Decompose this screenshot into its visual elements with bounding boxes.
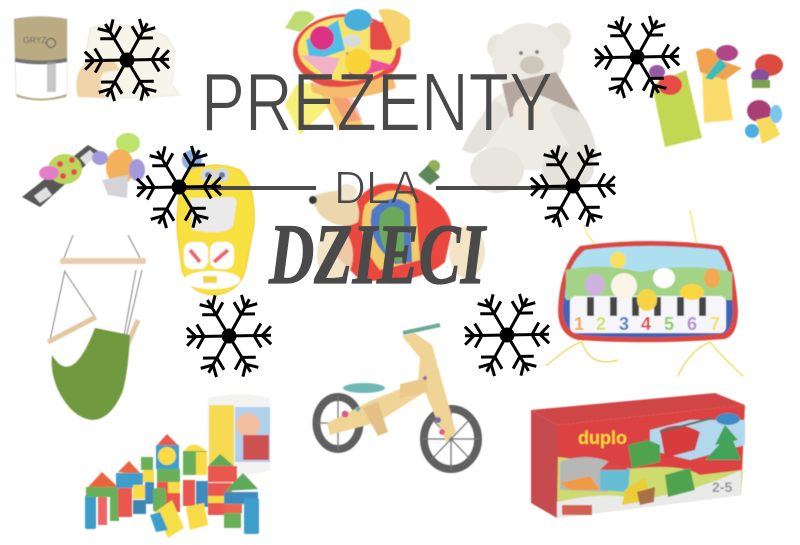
icon: LEGO Duplo box: duplo [578,428,627,448]
icon: wrist rattles on checkered strip [22,133,145,207]
snowflake 5 [186,293,272,379]
divider line left [179,186,316,190]
icon: green hanging chair [48,235,146,420]
icon: plush activity wheel [285,9,410,135]
icon: piano play mat: 4 [641,314,651,334]
icon: LEGO Duplo box [531,393,745,518]
snowflake 1 [84,17,170,103]
snowflake 4 [594,14,680,100]
heading: DZIECI: DZIECI [268,206,487,302]
icon: piano play mat: 6 [687,314,697,334]
heading: DLA: DLA [334,162,420,214]
icon: wooden pull-along dog [309,160,485,283]
heading: PREZENTY: PREZENTY [201,56,553,148]
icon: Gryzzle tin: GRYZ [23,35,46,45]
icon: baby phone toy [177,150,254,295]
icon: piano play mat: 5 [664,314,674,334]
icon: Gryzzle tin [14,16,67,100]
icon: piano play mat: 7 [710,314,720,334]
divider line right [436,186,573,190]
icon: LEGO Duplo box: 2-5 [712,479,732,495]
icon: teddy bear [462,23,597,193]
snowflake 3 [530,143,616,229]
icon: baby rattle socks [649,45,783,147]
icon: piano play mat: 2 [596,314,606,334]
snowflake 2 [136,144,222,230]
title block [179,56,573,302]
icon: piano play mat [546,210,743,376]
icon: balance bike [316,325,479,470]
icon: wooden blocks and tub [85,394,270,538]
icon: piano play mat: 3 [619,314,629,334]
snowflake 6 [464,292,550,378]
icon: piano play mat: 1 [574,314,584,334]
icon: wooden teether with cloth [76,24,180,98]
